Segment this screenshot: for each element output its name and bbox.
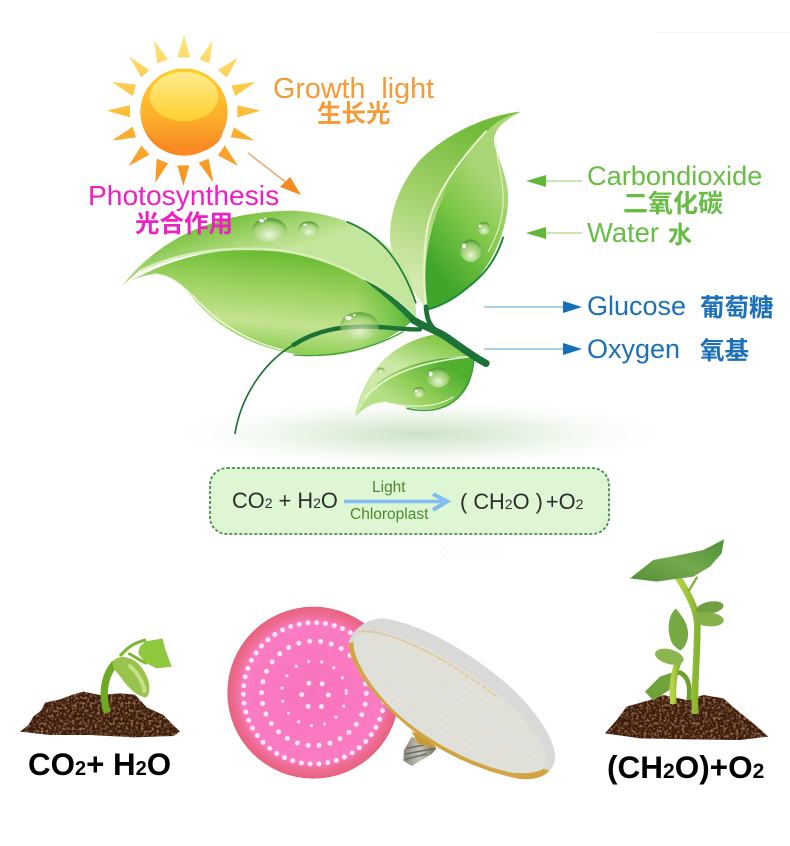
right leaf [390,112,521,309]
arrow: carbon dioxide in [526,175,582,187]
reaction condition: chloroplast: Chloroplast [350,506,429,523]
stem [235,307,486,433]
soil mound [605,695,768,740]
faint top-right streak [655,32,790,33]
label: growth light: 生长光 [317,95,390,130]
screw base [403,732,437,766]
label: oxygen: 氧基 [700,332,749,367]
LED grow lamp pair [227,607,555,782]
label: water: 水 [668,215,692,250]
label: oxygen [587,332,749,367]
leaf ground shadow [155,396,685,472]
label: growth light [273,73,434,130]
arrow: sunlight to leaf [248,153,301,195]
sun disc [140,68,228,156]
arrow: water in [526,227,582,239]
label: glucose: Glucose [587,291,686,321]
seedling in soil [20,638,180,737]
label: glucose: 葡萄糖 [700,289,774,324]
label: photosynthesis: 光合作用 [135,205,233,240]
arrow: oxygen out [484,343,582,355]
panel: chemical equation [210,468,609,534]
water droplets [252,218,490,398]
caption: reactants: CO2+ H2O [28,747,171,782]
label: carbon dioxide [587,160,762,220]
label: growth light: Growth light [273,73,434,105]
sun rays [107,35,261,186]
pink LED lamp [227,607,399,779]
faint dots below panel [440,551,500,553]
bottom leaf [355,334,474,417]
label: oxygen: Oxygen [587,334,680,364]
label: carbon dioxide: Carbondioxide [587,160,762,191]
reaction arrow [344,494,447,510]
label: water: Water [587,217,659,248]
equation reactants: CO2 + H2O [232,488,338,513]
caption: products: (CH2O)+O2 [607,749,764,785]
leaf cluster [122,112,521,433]
equation products: ( CH2O )+O2 [460,489,584,514]
reaction condition: light: Light [372,479,406,496]
arrow: glucose out [484,301,582,313]
large left leaf [122,211,417,356]
label: carbon dioxide: 二氧化碳 [623,184,723,220]
label: water [587,215,692,250]
label: photosynthesis [88,179,279,240]
young plant in soil [605,539,768,740]
icon: sun [107,35,261,186]
label: photosynthesis: Photosynthesis [88,179,279,211]
white LED lamp [348,618,555,782]
plant [630,539,724,714]
label: glucose [587,289,774,324]
soil mound [20,692,180,737]
sprout [104,638,172,713]
